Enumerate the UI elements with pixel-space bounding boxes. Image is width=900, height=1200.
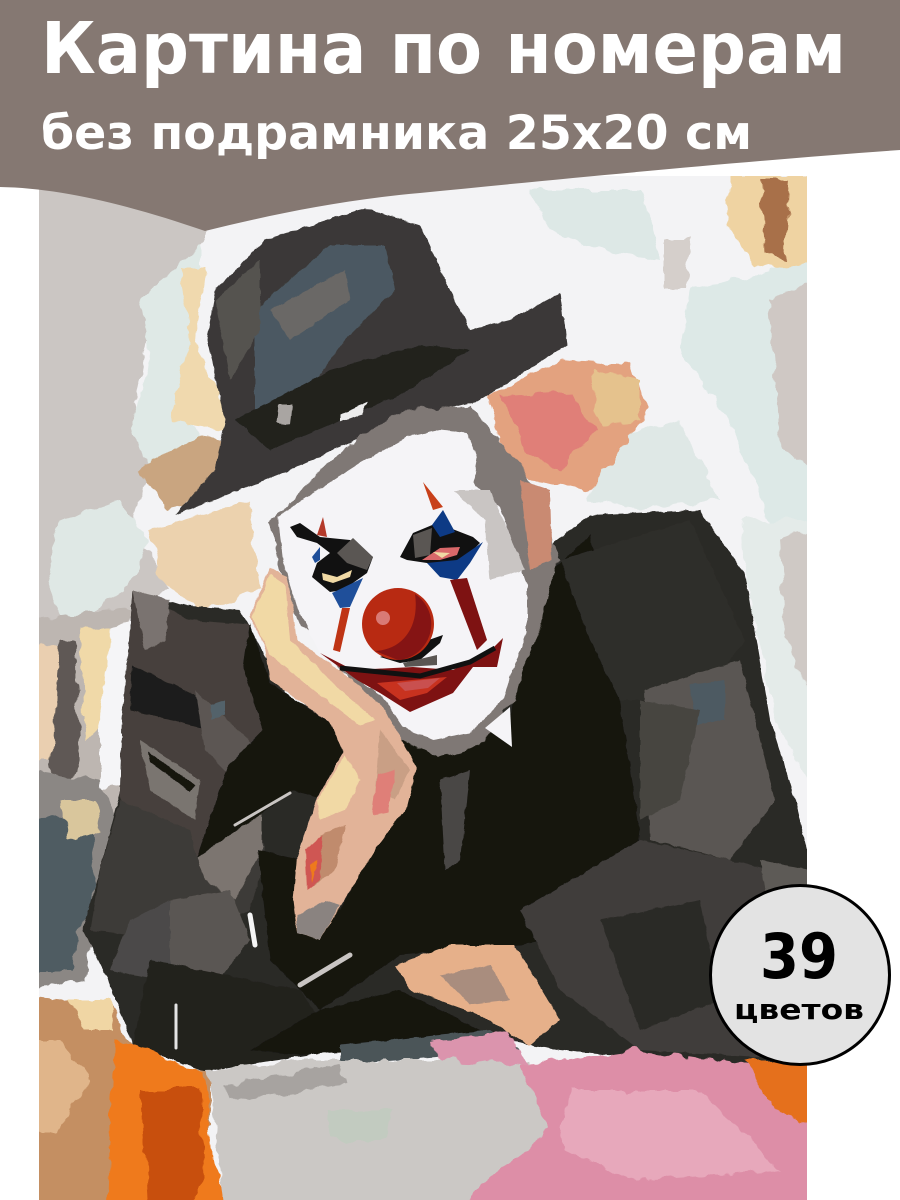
collar [485,707,512,747]
ear [520,480,552,570]
bottom table and cloth [20,995,820,1200]
left eye [290,523,373,592]
hat [175,208,567,515]
pink hair [490,360,650,490]
clown nose [362,588,434,660]
sleeve highlights [176,793,350,1048]
face shadow [268,405,560,755]
right cheek shadow [453,490,525,580]
hand and arm [250,567,560,1045]
subtitle: без подрамника 25х20 см [41,106,752,161]
mouth [320,638,503,712]
header banner [0,0,900,231]
title: Картина по номерам [41,7,846,90]
background patches [20,170,820,990]
badge: 39 colors: 39 [760,920,838,993]
face [268,405,560,755]
white face [278,430,527,740]
badge: 39 colors: цветов [734,993,864,1026]
right eye [400,525,480,564]
jacket [83,510,812,1072]
badge: 39 colors [710,886,890,1064]
